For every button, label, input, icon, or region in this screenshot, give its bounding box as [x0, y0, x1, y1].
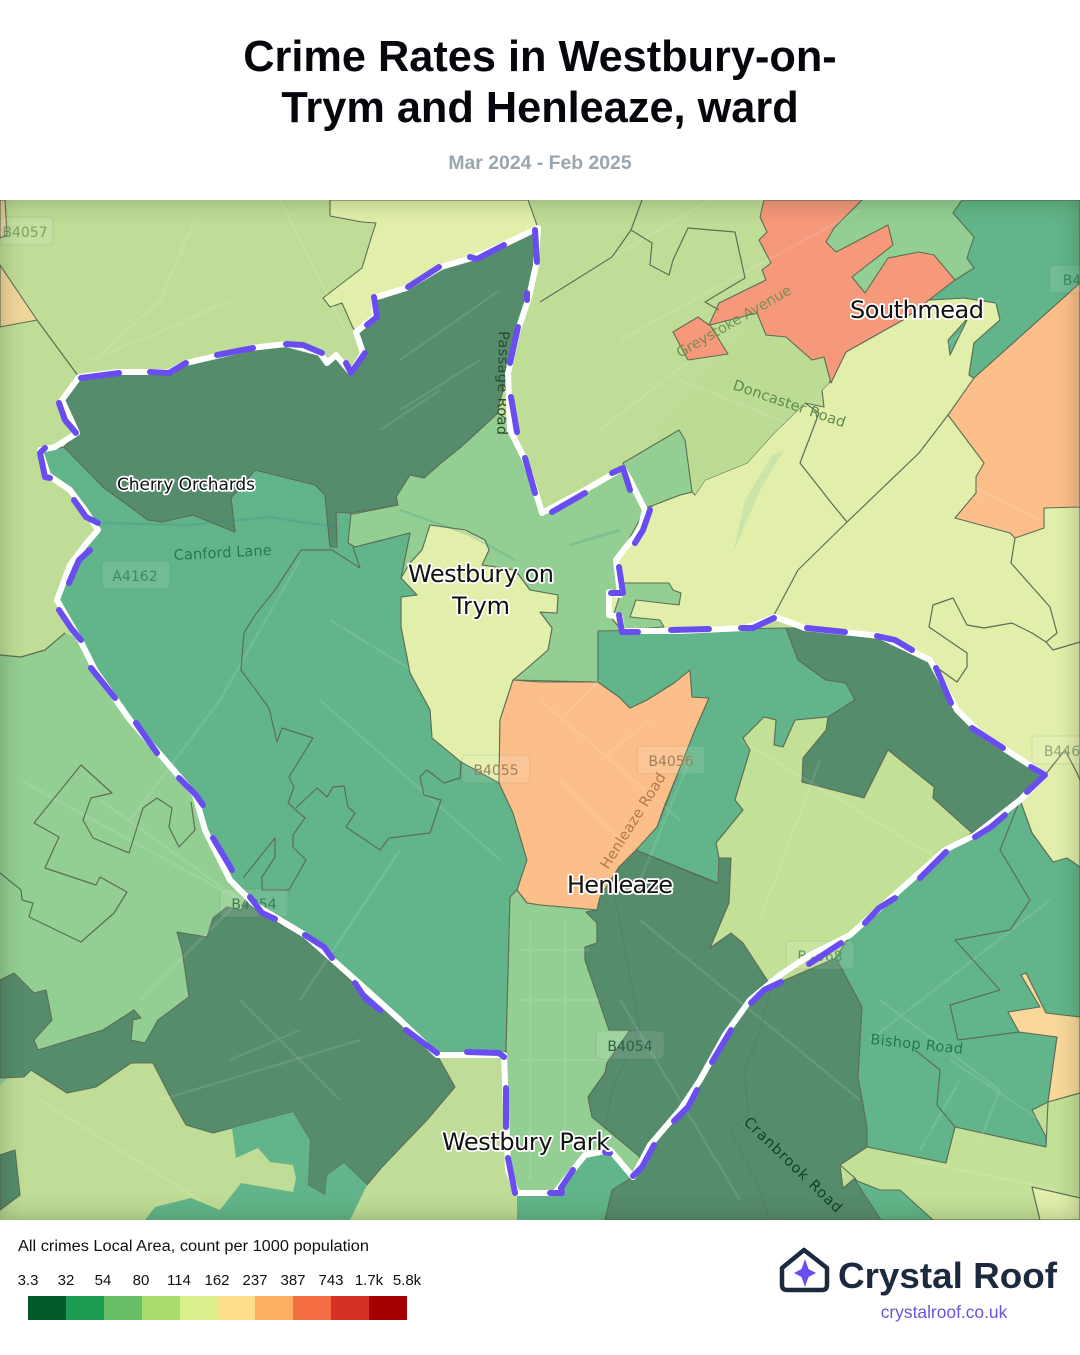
legend scale labels: 32	[58, 1272, 74, 1289]
place labels: Trym	[451, 592, 510, 620]
pond in park	[733, 450, 784, 553]
road shields: B446	[1044, 744, 1080, 760]
road names: Bishop Road	[870, 1032, 964, 1058]
road names: Canford Lane	[173, 543, 272, 564]
legend scale labels: 162	[204, 1272, 230, 1289]
road shields: B4068	[797, 949, 843, 965]
road names: Cranbrook Road	[740, 1114, 845, 1216]
road names: Henleaze Road	[598, 770, 670, 872]
stream	[103, 510, 620, 560]
place labels: Henleaze	[567, 871, 673, 899]
legend scale labels: 3.3	[18, 1272, 38, 1289]
ward boundary	[40, 228, 1045, 1193]
road names	[173, 283, 964, 1216]
road names: Greystoke Avenue	[674, 283, 795, 361]
road shields: B4054	[607, 1039, 653, 1055]
legend scale labels: 114	[167, 1272, 191, 1289]
place labels: Westbury Park	[442, 1128, 610, 1156]
brand name: Crystal Roof	[838, 1255, 1058, 1296]
choropleth areas	[0, 200, 1080, 1220]
road shields: B4057	[2, 225, 48, 241]
road shields: B4055	[473, 763, 519, 779]
title: Trym and Henleaze, ward	[281, 84, 799, 132]
website: crystalroof.co.uk	[881, 1302, 1008, 1322]
icon: Crystal Roof house logo	[782, 1250, 827, 1290]
boundary lines inside wards	[0, 200, 1080, 1220]
place labels: Westbury on	[408, 560, 554, 588]
road shields: A4162	[112, 569, 158, 585]
legend scale labels: 54	[95, 1272, 111, 1289]
legend scale labels: 237	[242, 1272, 268, 1289]
footer	[18, 1238, 1058, 1322]
place labels: Southmead	[850, 296, 984, 324]
road shields	[0, 217, 1080, 1059]
legend scale labels: 387	[280, 1272, 306, 1289]
road network texture	[20, 170, 1060, 1200]
legend scale labels: 743	[318, 1272, 344, 1289]
legend scale labels: 5.8k	[393, 1272, 422, 1289]
road names: Doncaster Road	[731, 378, 847, 431]
legend title: All crimes Local Area, count per 1000 population	[18, 1238, 369, 1255]
road names: Passage Road	[493, 331, 511, 435]
date range subtitle: Mar 2024 - Feb 2025	[448, 152, 632, 174]
road shields: B4056	[648, 754, 694, 770]
legend scale labels	[18, 1272, 422, 1289]
legend colour bar	[28, 1296, 407, 1320]
title: Crime Rates in Westbury-on-	[243, 33, 837, 81]
legend scale labels: 80	[133, 1272, 149, 1289]
road shields: B4054	[231, 897, 277, 913]
place labels	[117, 296, 984, 1156]
place labels: Cherry Orchards	[117, 475, 255, 495]
map panel	[0, 200, 1080, 1220]
legend scale labels: 1.7k	[355, 1272, 384, 1289]
title	[243, 33, 837, 132]
